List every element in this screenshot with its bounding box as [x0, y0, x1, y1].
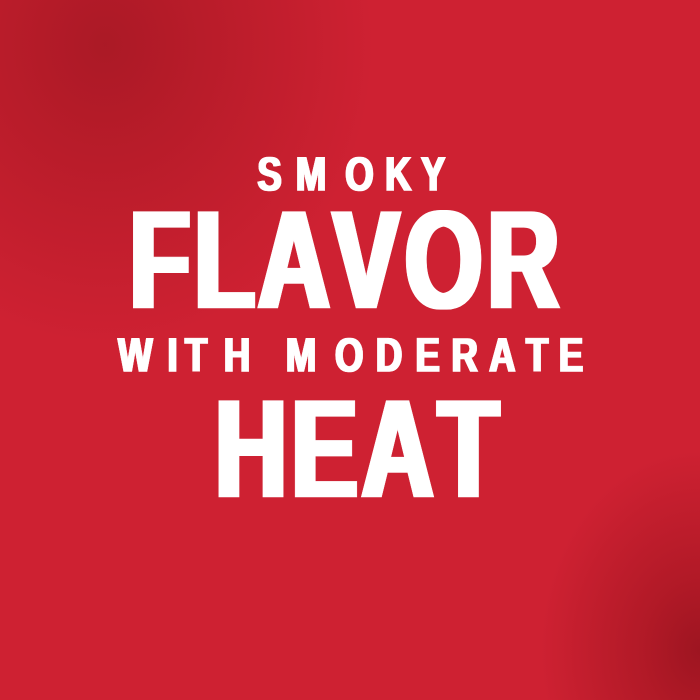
- heading: WITH MODERATE: WITH MODERATE: [118, 329, 583, 383]
- heading: FLAVOR: FLAVOR: [130, 181, 559, 338]
- heading: SMOKY: SMOKY: [257, 148, 445, 202]
- heading: HEAT: HEAT: [215, 370, 499, 527]
